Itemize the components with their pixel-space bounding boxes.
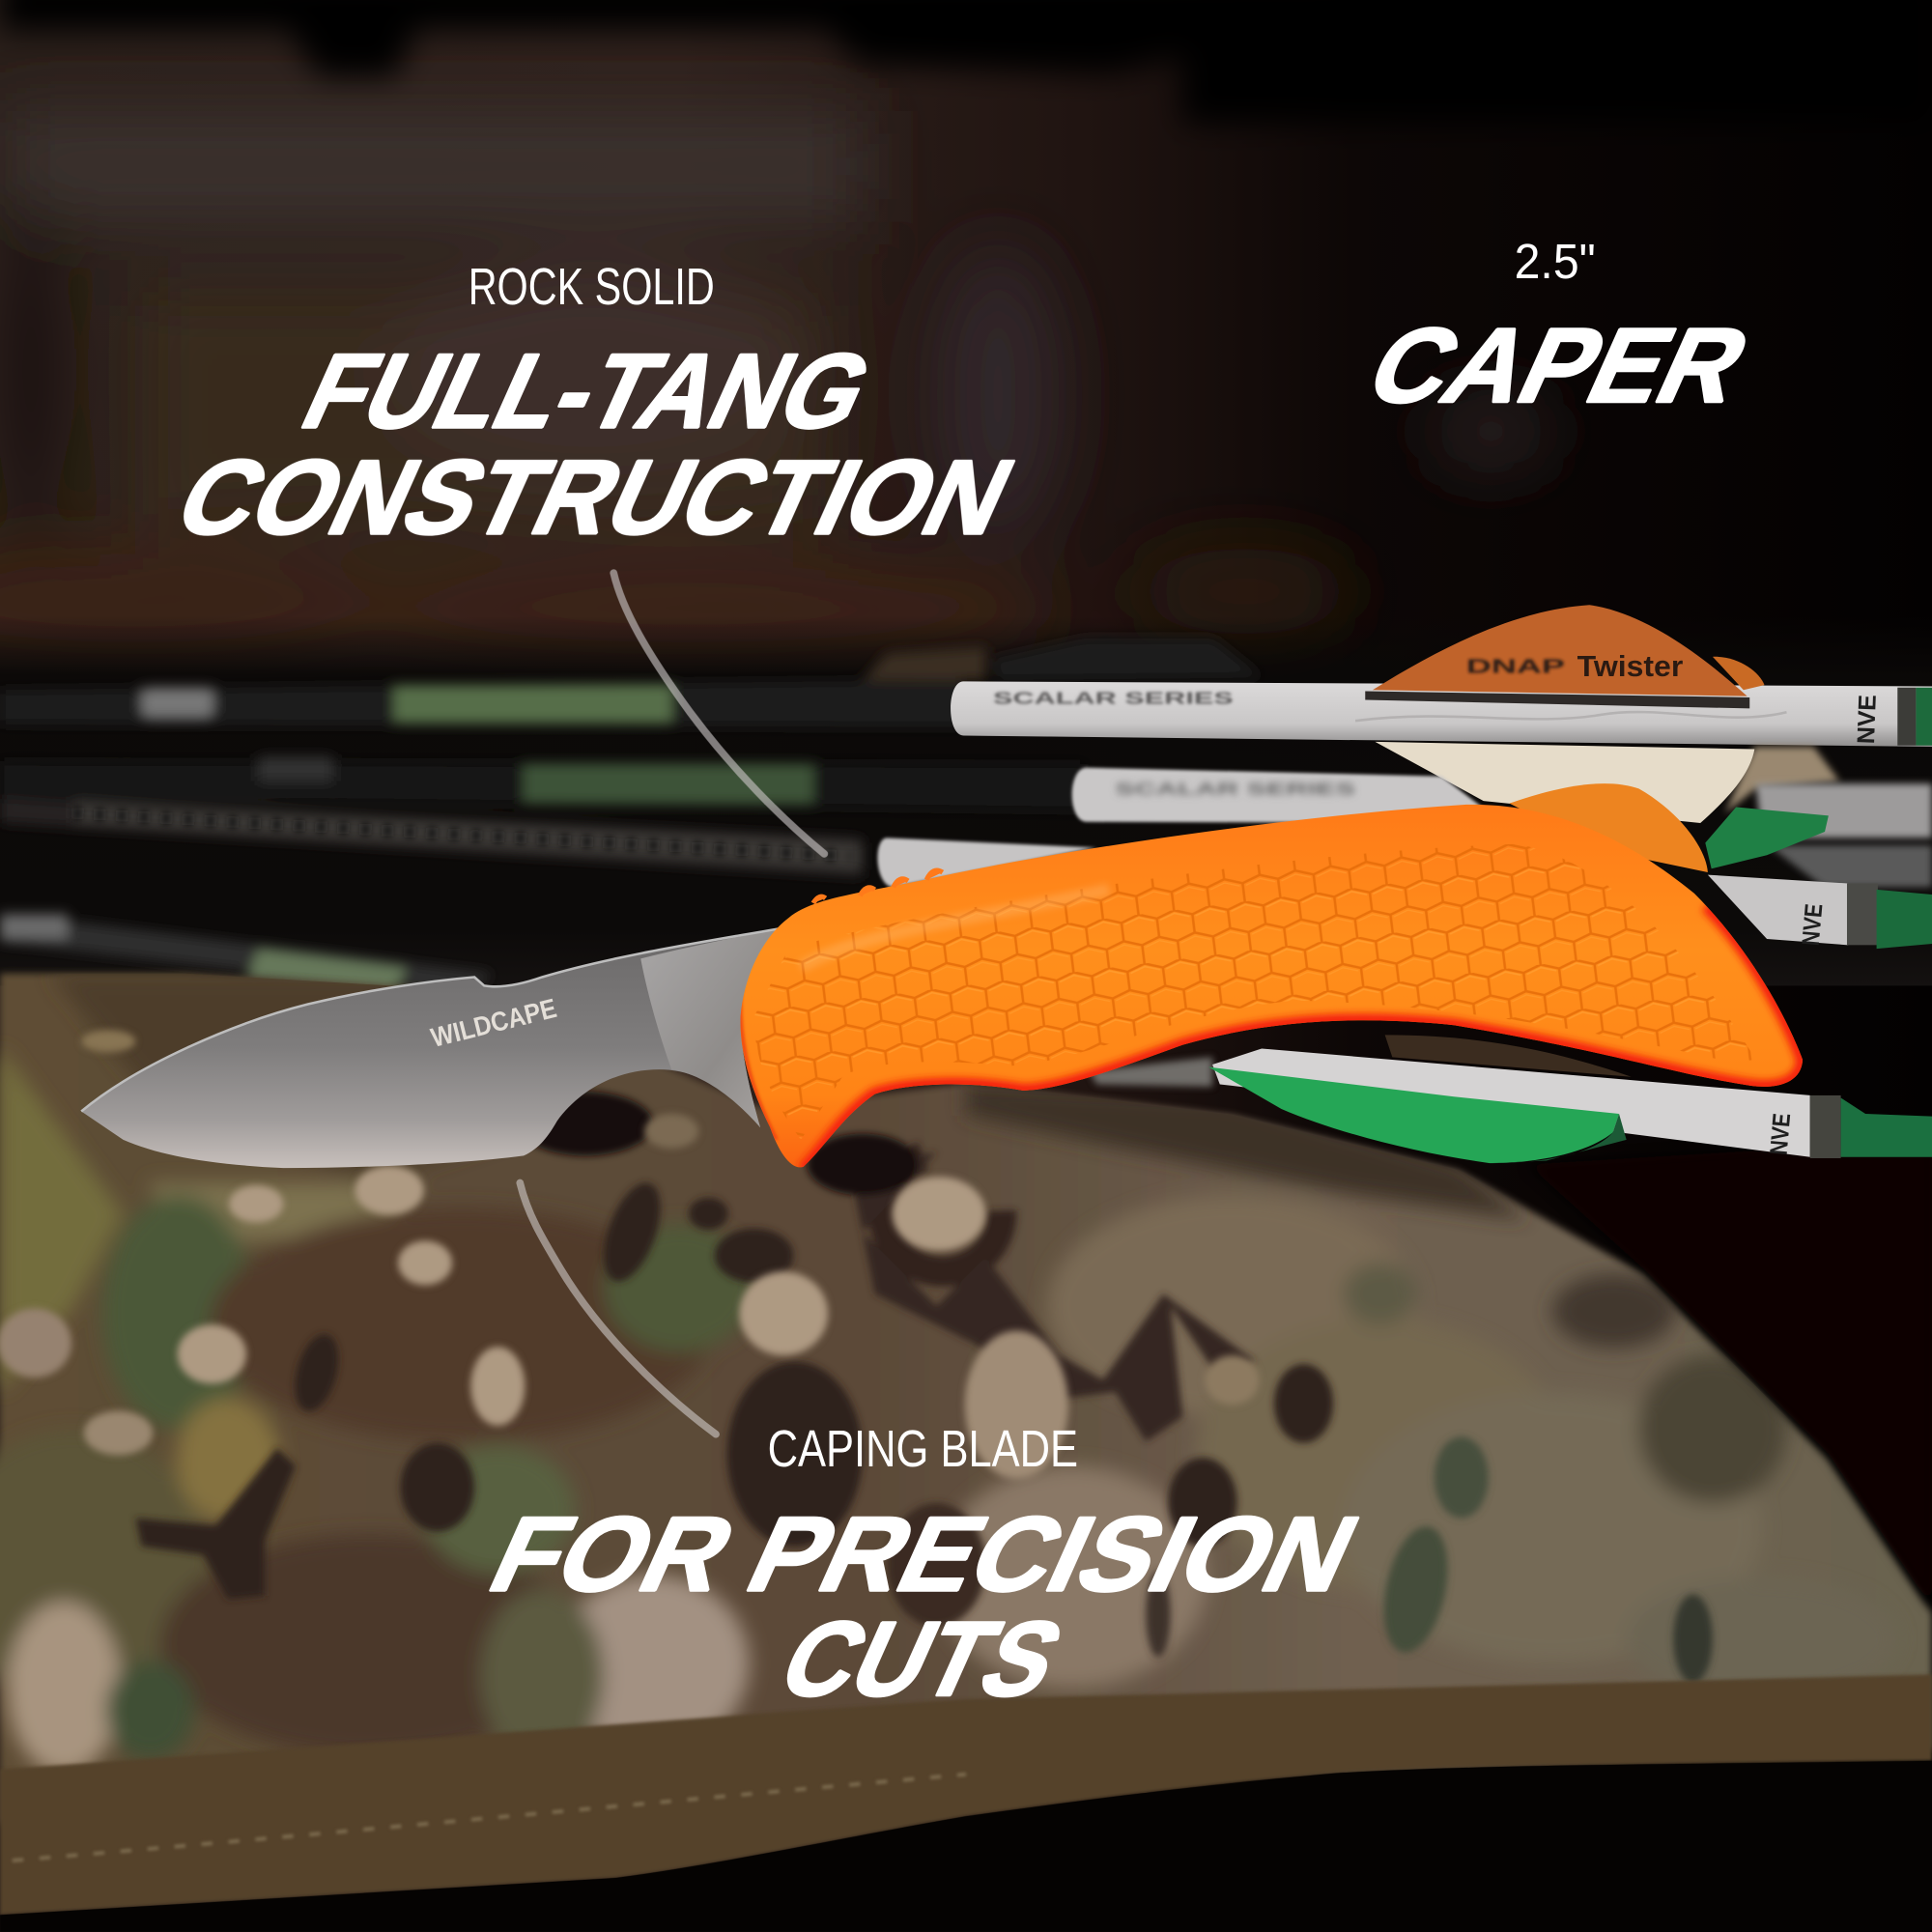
blade logo: WILDCAPE — [428, 993, 559, 1053]
subheading: ROCK SOLID — [469, 259, 715, 316]
grip ridges — [813, 870, 943, 903]
heading line 2: CONSTRUCTION — [159, 439, 1031, 556]
heading line 1: FULL-TANG — [286, 332, 890, 450]
third arrow: NVE — [1798, 902, 1828, 947]
heading line 2: CUTS — [763, 1601, 1080, 1719]
highlight — [801, 890, 1109, 967]
background arrows: blurred dark shafts — [0, 616, 1932, 996]
blade tang polish — [640, 927, 783, 1127]
leader line: full-tang — [613, 573, 824, 854]
top arrow with Twister fletching — [951, 605, 1932, 823]
callout: rock solid full-tang construction — [159, 259, 1031, 556]
vane label: DNAP — [1466, 656, 1565, 677]
second arrow — [1072, 768, 1932, 887]
right shadow — [1528, 1140, 1932, 1608]
bag hem strip — [0, 1674, 1932, 1915]
blade — [81, 927, 783, 1168]
shaft — [951, 681, 1932, 747]
third arrow — [877, 838, 1932, 949]
hem stitching — [13, 1775, 966, 1861]
orange vane — [1713, 657, 1765, 690]
camo bag — [0, 974, 1932, 1824]
bottom shadow — [0, 1761, 1932, 1932]
knife — [81, 805, 1803, 1171]
handle hex texture — [754, 844, 1756, 1140]
heading: CAPER — [1350, 307, 1767, 425]
cream vane — [1725, 747, 1839, 813]
callout: caping blade for precision cuts — [472, 1421, 1376, 1719]
leader line: caping blade — [520, 1182, 716, 1435]
handle — [740, 805, 1803, 1171]
subheading: CAPING BLADE — [768, 1421, 1078, 1478]
lower arrow with green fletching — [1090, 1035, 1932, 1163]
camo dark shapes — [135, 1092, 1713, 1683]
camo colour patches — [0, 974, 1897, 1775]
heading line 1: FOR PRECISION — [472, 1495, 1376, 1614]
dark top shapes — [0, 0, 1932, 124]
top arrow with Twister fletching: Twister — [1577, 650, 1683, 683]
shaft marbling — [1355, 712, 1786, 721]
shaft print: SCALAR SERIES — [993, 688, 1234, 707]
handle red shading — [740, 906, 1803, 1171]
size label: 2.5" — [1515, 234, 1596, 289]
callout: 2.5 inch caper — [1350, 234, 1767, 425]
second arrow: SCALAR SERIES — [1115, 780, 1355, 799]
top arrow with Twister fletching: NVE — [1853, 695, 1882, 745]
camo light spots — [0, 1030, 1260, 1479]
lower arrow with green fletching: NVE — [1766, 1112, 1796, 1156]
